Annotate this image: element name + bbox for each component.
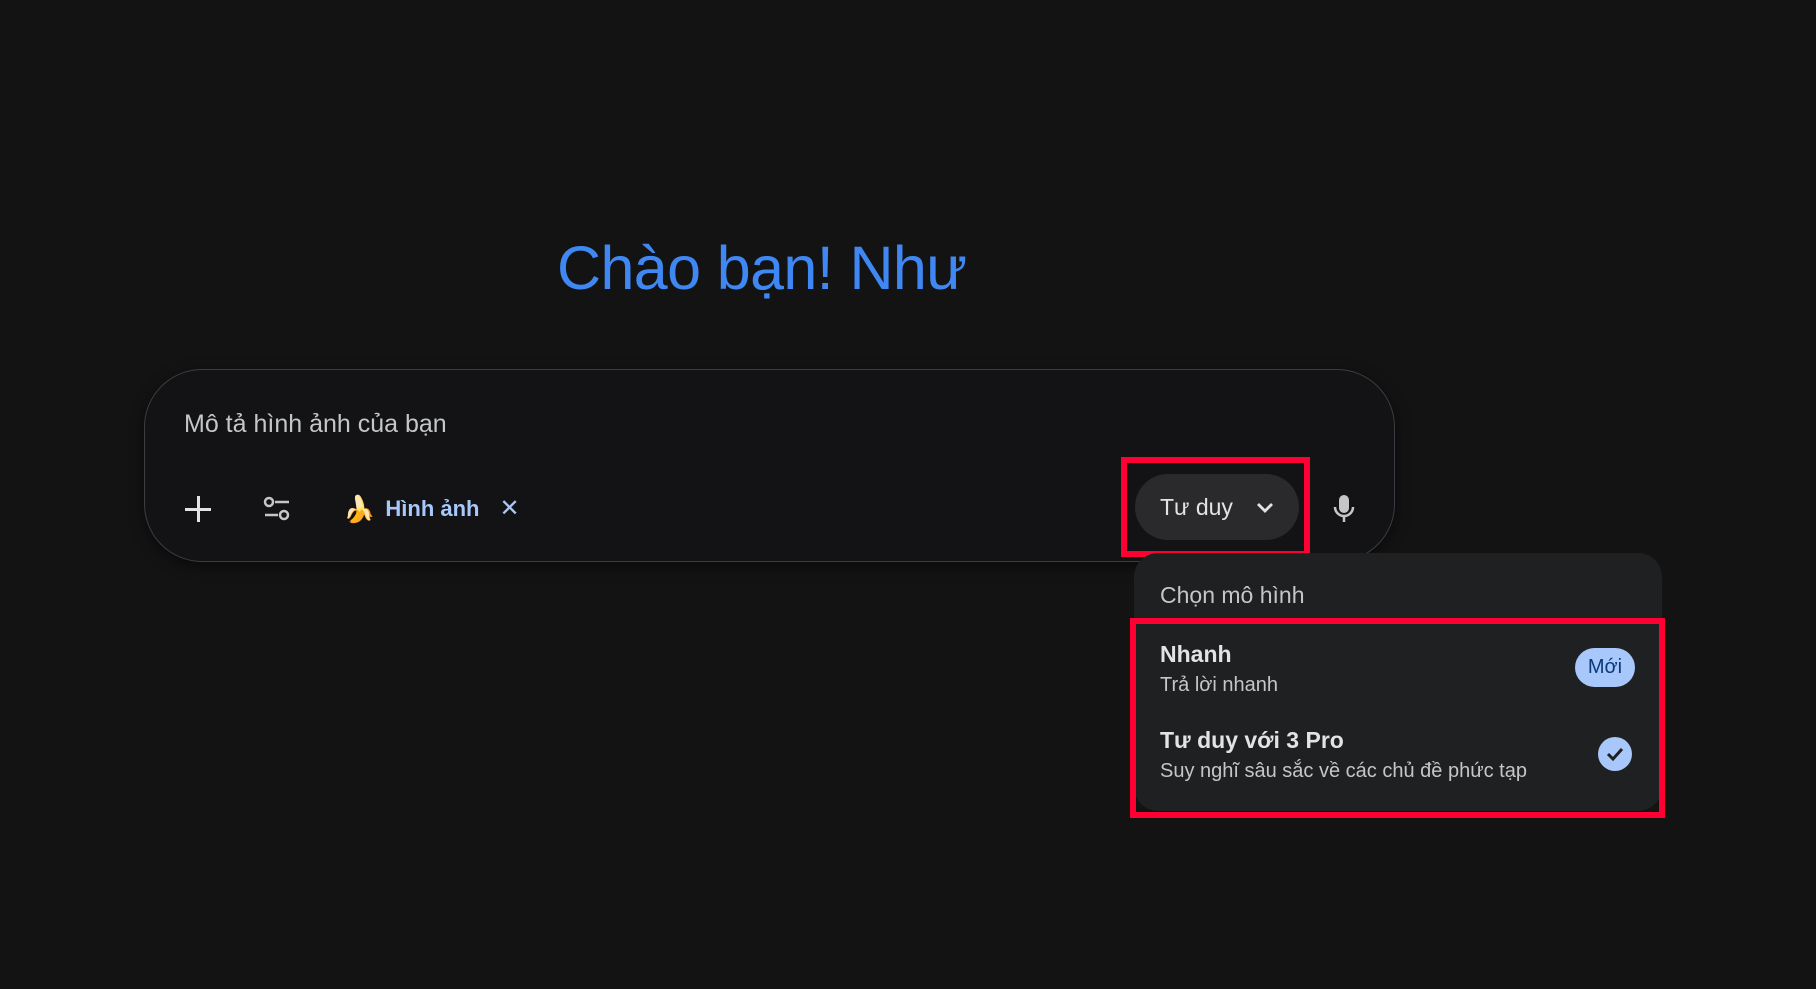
badge: new [1575, 648, 1635, 687]
icon: plus [185, 496, 211, 522]
dropdown menu [1134, 553, 1662, 811]
placeholder text: Mô tả hình ảnh của bạn [184, 410, 447, 438]
model pill button: Tư duy [1160, 494, 1233, 520]
icon: mic [1334, 495, 1354, 522]
option: Tư duy với 3 Pro: Tư duy với 3 Pro [1160, 727, 1344, 753]
option: Tư duy với 3 Pro: Suy nghĩ sâu sắc về các chủ đề phức tạp [1160, 760, 1527, 782]
option: Nhanh [1160, 641, 1635, 696]
image chip: 🍌 [343, 494, 375, 524]
option: Nhanh: Trả lời nhanh [1160, 674, 1278, 696]
title: Chào bạn! Như [557, 234, 966, 302]
icon: tools [264, 496, 290, 520]
menu header: Chọn mô hình [1160, 582, 1304, 608]
image chip [343, 494, 520, 524]
input box [144, 369, 1395, 562]
badge: new: Mới [1588, 656, 1622, 678]
image chip: ✕ [499, 495, 520, 522]
option: Tư duy với 3 Pro [1160, 727, 1632, 782]
model pill button [1135, 474, 1299, 540]
highlight box: options [1130, 618, 1665, 818]
icon: check [1598, 737, 1632, 771]
image chip: Hình ảnh [385, 496, 479, 521]
option: Nhanh: Nhanh [1160, 641, 1232, 667]
highlight box: model button [1121, 457, 1310, 557]
